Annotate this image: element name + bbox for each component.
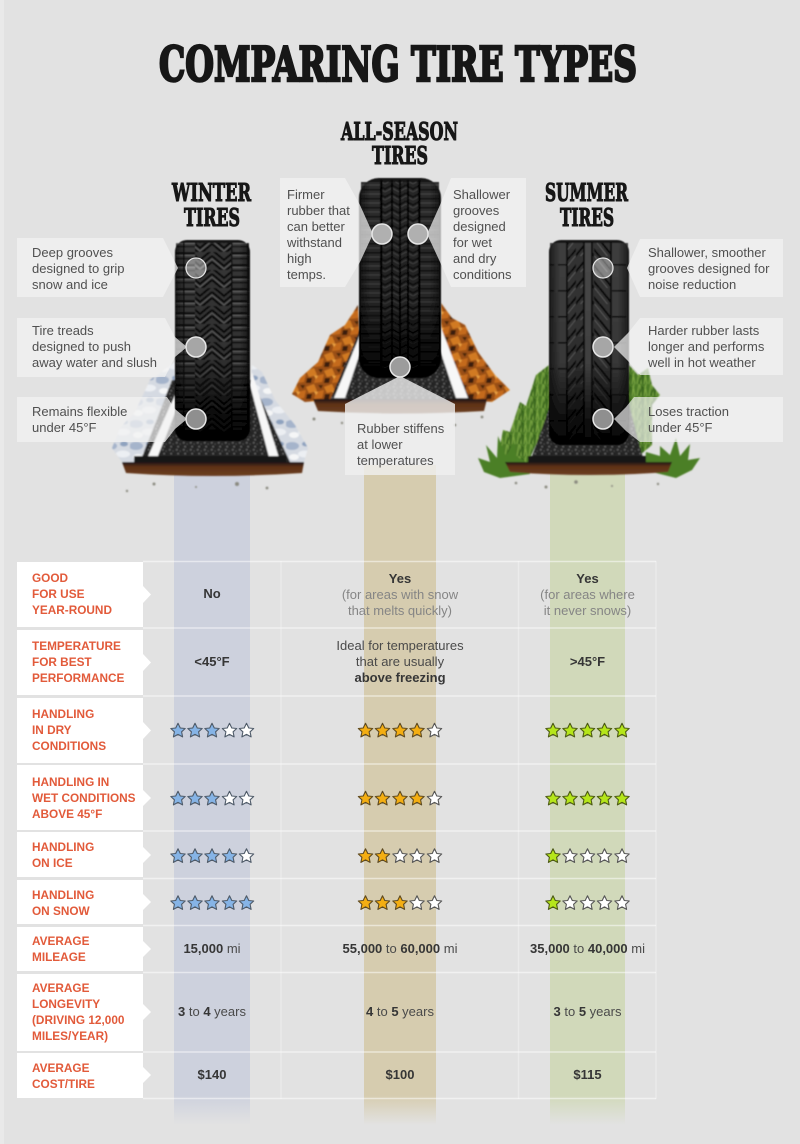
row values: year-round: (for areas with snow [342,587,459,602]
row values: year-round: Yes [389,571,411,586]
comparison table [17,561,656,1099]
callout: shallower grooves: and dry [453,251,497,266]
callout: tire treads: away water and slush [32,355,157,370]
row: wet [358,791,442,805]
callout: firmer rubber: Firmer [287,187,325,202]
callout: firmer rubber: can better [287,219,345,234]
row values: average cost: $115 [573,1067,602,1082]
callout: remains flexible: under 45°F [32,420,97,435]
callout: tire treads: Tire treads [32,323,94,338]
callout: shallower smoother grooves: Shallower, smoother [648,245,766,260]
label: handling dry: IN DRY [32,723,72,737]
row values: year-round: Yes [576,571,599,586]
callout: harder rubber: longer and performs [648,339,765,354]
callout: shallower smoother grooves: noise reduction [648,277,736,292]
label: handling snow [17,880,151,924]
callout: shallower grooves: grooves [453,203,500,218]
callout: shallower grooves: conditions [453,267,512,282]
callout: deep grooves: Deep grooves [32,245,113,260]
label: handling ice: ON ICE [32,856,73,870]
callout: rubber stiffens: at lower [357,437,403,452]
callout: harder rubber: Harder rubber lasts [648,323,760,338]
label: handling dry: CONDITIONS [32,739,106,753]
label: handling wet: HANDLING IN [32,775,109,789]
callout: firmer rubber [280,178,392,287]
row: wet [546,791,629,805]
label: handling wet [17,765,151,830]
row values: average mileage [183,941,645,956]
callout: remains flexible: Remains flexible [32,404,127,419]
label: handling snow: ON SNOW [32,904,91,918]
label: good for use year-round: GOOD [32,571,69,585]
label: good for use year-round: FOR USE [32,587,85,601]
callout: firmer rubber: withstand [286,235,342,250]
label: handling snow: HANDLING [32,888,94,902]
heading: winter tires [171,178,252,232]
row: dry [358,723,442,737]
callout: harder rubber [593,318,783,375]
heading: summer tires: SUMMER [545,178,629,207]
label: good for use year-round [17,562,151,627]
row values: average longevity [178,1004,622,1019]
callout: firmer rubber: rubber that [287,203,350,218]
illustration: winter road with snow [112,362,308,492]
row values: year-round: that melts quickly) [348,603,452,618]
callout: tire treads: designed to push [32,339,131,354]
row values: temperature [194,638,605,685]
label: handling ice: HANDLING [32,840,94,854]
callout: shallower grooves [408,178,526,287]
row values: average longevity: 4 to 5 years [366,1004,434,1019]
row values: temperature: <45°F [194,654,230,669]
row labels [17,562,151,1098]
star ratings: winter [171,723,254,909]
callout: remains flexible [17,397,206,442]
callout: shallower smoother grooves [593,239,783,297]
heading: all-season tires: ALL-SEASON [340,117,458,146]
callout: loses traction: Loses traction [648,404,729,419]
label: temperature: PERFORMANCE [32,671,125,685]
row values: year-round: (for areas where [540,587,635,602]
callout: firmer rubber: temps. [287,267,326,282]
label: average mileage [17,927,151,971]
row: ice [358,849,442,862]
label: average longevity: MILES/YEAR) [32,1029,108,1043]
row: ice [171,849,254,862]
tire: summer [549,240,629,445]
row values: average cost: $140 [198,1067,226,1082]
star ratings: all-season [358,723,442,909]
row values: average mileage: 15,000 mi [183,941,241,956]
tire: winter [175,240,250,441]
callout: shallower grooves: for wet [453,235,492,250]
heading: summer tires: TIRES [560,203,614,232]
label: handling ice [17,832,151,877]
table grid lines [143,561,656,1099]
callout: shallower grooves: designed [453,219,506,234]
callout: deep grooves [17,238,206,297]
row values: temperature: that are usually [356,654,445,669]
callout: loses traction [593,397,783,442]
row values: average longevity: 3 to 5 years [554,1004,622,1019]
row values: temperature: Ideal for temperatures [336,638,464,653]
label: average longevity: (DRIVING 12,000 [32,1013,125,1027]
row: snow [171,896,254,909]
label: temperature: FOR BEST [32,655,92,669]
callouts: summer [593,239,783,442]
row values: average mileage: 35,000 to 40,000 mi [530,941,645,956]
heading: winter tires: WINTER [171,178,252,207]
row: wet [171,791,254,805]
row values: average cost: $100 [386,1067,414,1082]
label: average longevity: LONGEVITY [32,997,100,1011]
callouts: all-season [280,178,526,475]
star ratings: summer [546,723,629,909]
callout: deep grooves: snow and ice [32,277,108,292]
row values: year-round: No [203,586,221,601]
row: dry [171,723,254,737]
heading: all-season tires [340,117,458,170]
row: dry [546,723,629,737]
label: average cost: AVERAGE [32,1061,90,1075]
callout: loses traction: under 45°F [648,420,713,435]
label: handling wet: ABOVE 45°F [32,807,102,821]
tire: all-season [359,178,441,378]
illustration: all-season road with leaves [292,303,510,426]
label: average longevity [17,974,151,1051]
callout: shallower smoother grooves: grooves designed for [648,261,770,276]
row values: temperature: above freezing [354,670,446,685]
callout: harder rubber: well in hot weather [647,355,756,370]
colored column strips [174,465,625,1125]
callout: shallower grooves: Shallower [453,187,511,202]
row values: year-round [203,571,635,618]
callout: deep grooves: designed to grip [32,261,125,276]
callout: rubber stiffens: Rubber stiffens [357,421,445,436]
callouts: winter [17,238,206,442]
heading: summer tires [545,178,629,232]
row values: average cost [198,1067,602,1082]
label: handling wet: WET CONDITIONS [32,791,136,805]
label: average cost [17,1053,151,1098]
label: temperature [17,630,151,695]
heading: all-season tires: TIRES [372,141,428,170]
label: handling dry: HANDLING [32,707,94,721]
row values: average mileage: 55,000 to 60,000 mi [343,941,458,956]
label: average mileage: AVERAGE [32,934,90,948]
heading: winter tires: TIRES [184,203,240,232]
label: temperature: TEMPERATURE [32,639,121,653]
label: average cost: COST/TIRE [32,1077,95,1091]
label: average longevity: AVERAGE [32,981,90,995]
row: snow [546,896,629,909]
callout: rubber stiffens: temperatures [357,453,434,468]
row values: year-round: it never snows) [544,603,631,618]
row values: average longevity: 3 to 4 years [178,1004,246,1019]
illustration: summer road with grass [478,365,700,488]
label: handling dry [17,698,151,763]
label: good for use year-round: YEAR-ROUND [32,603,112,617]
row: snow [358,896,442,909]
callout: rubber stiffens [345,357,455,475]
row values: temperature: >45°F [570,654,605,669]
callout: tire treads [17,318,206,377]
row: ice [546,849,629,862]
callout: firmer rubber: high [287,251,312,266]
label: average mileage: MILEAGE [32,950,86,964]
